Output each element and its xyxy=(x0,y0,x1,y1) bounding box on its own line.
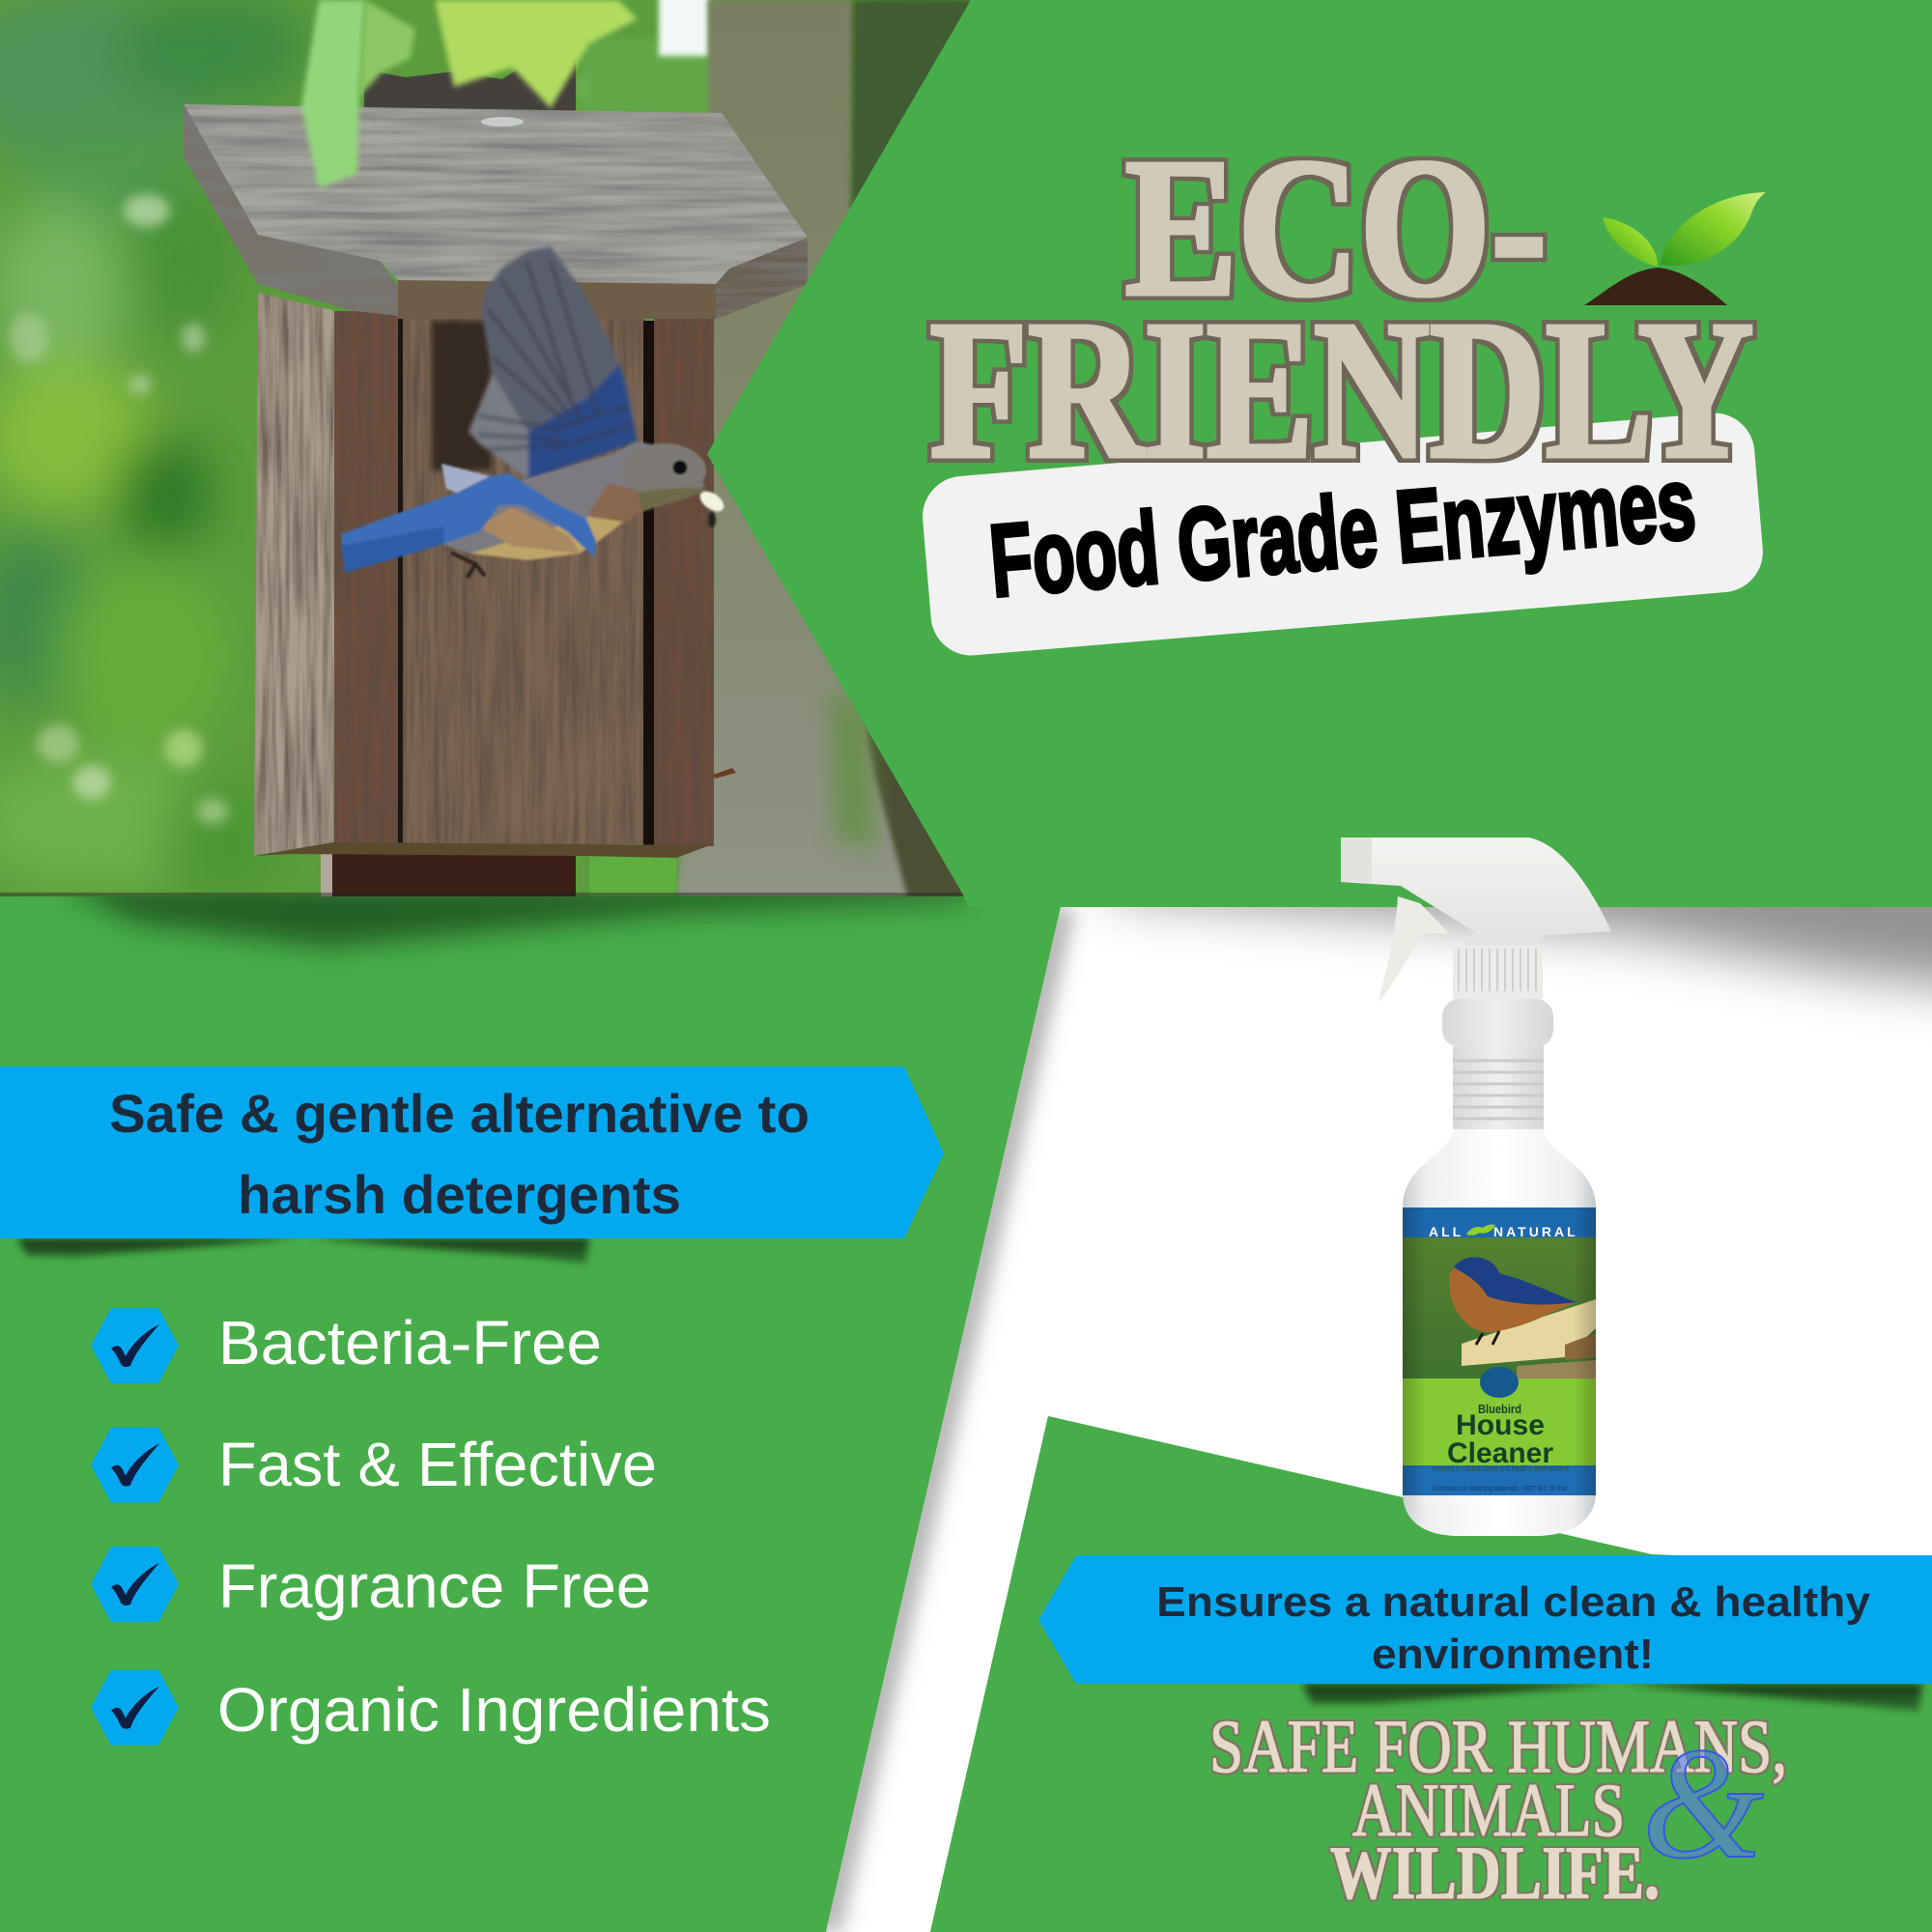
shadow: below right banner xyxy=(1302,1684,1922,1712)
photo: nest box front xyxy=(254,311,736,858)
label: curved edge shading xyxy=(1403,1208,1596,1495)
shadow: under the top green panel xyxy=(1111,850,1932,995)
callout: Food Grade Enzymes xyxy=(920,410,1766,659)
photo: blurred foliage background xyxy=(0,0,976,898)
photo: green gap beside the trunk xyxy=(580,40,707,112)
banner: safe and gentle: Safe & gentle alternative to xyxy=(109,1083,810,1144)
bottle: label: Directions on Washing Materials - NET WT 16 fl oz xyxy=(1433,1486,1568,1492)
title: ECO-FRIENDLY: ECO- xyxy=(1124,116,1548,338)
photo: sky gap xyxy=(659,0,709,56)
bottle: collar xyxy=(1453,945,1543,1001)
tagline: safe for humans, animals and wildlife: SAFE FOR HUMANS, xyxy=(1209,1704,1787,1788)
banner: safe and gentle xyxy=(0,1066,944,1264)
title: ECO-FRIENDLY: FRIENDLY xyxy=(929,278,1754,500)
bird: food in beak xyxy=(698,489,725,514)
photo: dark lower edge xyxy=(0,893,976,896)
bottle: neck xyxy=(1453,1046,1544,1129)
photo: tree trunk xyxy=(676,0,911,896)
bottle: body xyxy=(1403,1046,1596,1536)
label: product name: Bluebird xyxy=(1478,1402,1521,1416)
bottle: spray head xyxy=(1341,838,1611,945)
white angled panel xyxy=(826,850,1932,1932)
checklist item: Fragrance Free: Fragrance Free xyxy=(218,1551,651,1621)
bottle: label xyxy=(1403,1208,1596,1495)
bird: head xyxy=(621,443,706,497)
bird: body xyxy=(441,441,705,560)
bird: legs xyxy=(451,553,485,578)
banner: natural clean: Ensures a natural clean & healthy xyxy=(1156,1578,1871,1626)
icon: sprout with soil xyxy=(1584,192,1766,305)
tagline: safe for humans, animals and wildlife xyxy=(1209,1704,1787,1915)
shadow: below left banner xyxy=(17,1238,589,1264)
label: bluebird xyxy=(1449,1257,1577,1345)
banner: natural clean xyxy=(1038,1555,1932,1712)
product: spray bottle xyxy=(1341,838,1611,1536)
photo: post below the box xyxy=(332,854,576,896)
bottle: label: House xyxy=(1456,1409,1545,1441)
bottle: label: NATURAL xyxy=(1493,1224,1578,1239)
banner: natural clean: environment! xyxy=(1372,1631,1654,1678)
photo: nest box roof xyxy=(184,104,808,319)
photo: bluebird at wooden nest box xyxy=(0,0,976,898)
bird: raised wing xyxy=(469,246,638,480)
photo: flying bluebird xyxy=(341,246,727,578)
bottle: label: ensures a natural clean and healthy environment xyxy=(1432,1463,1569,1473)
checklist item: Organic Ingredients: Organic Ingredients xyxy=(217,1675,771,1745)
photo: hanging leaves xyxy=(301,0,638,188)
label: small bird badge xyxy=(1480,1367,1519,1398)
bird: tail and wing xyxy=(340,471,597,558)
tagline: safe for humans, animals and wildlife: ANIMALS xyxy=(1352,1768,1625,1852)
shadow: along the left edge of the white panel xyxy=(826,907,1061,1932)
checklist item: Bacteria-Free: Bacteria-Free xyxy=(218,1308,602,1378)
bottle: trigger xyxy=(1378,896,1449,1003)
title: ECO-FRIENDLY xyxy=(929,116,1754,500)
banner: safe and gentle: harsh detergents xyxy=(238,1164,681,1225)
label: perch xyxy=(1462,1299,1596,1366)
photo: post above the roof xyxy=(364,29,576,111)
lower right green wedge xyxy=(930,1416,1932,1932)
photo: nest box side panel xyxy=(254,293,336,856)
ampersand: & xyxy=(1642,1715,1764,1891)
tagline: safe for humans, animals and wildlife: WILDLIFE. xyxy=(1330,1831,1660,1915)
shadow: under the photo on the lower green panel xyxy=(58,884,966,947)
checklist item: Bacteria-Free xyxy=(91,1308,602,1383)
checklist item: Fast & Effective: Fast & Effective xyxy=(218,1430,657,1499)
label: ALL NATURAL: ALL xyxy=(1429,1224,1463,1239)
bottle: neck ring xyxy=(1442,999,1553,1047)
bottle: label: Cleaner xyxy=(1447,1437,1553,1469)
